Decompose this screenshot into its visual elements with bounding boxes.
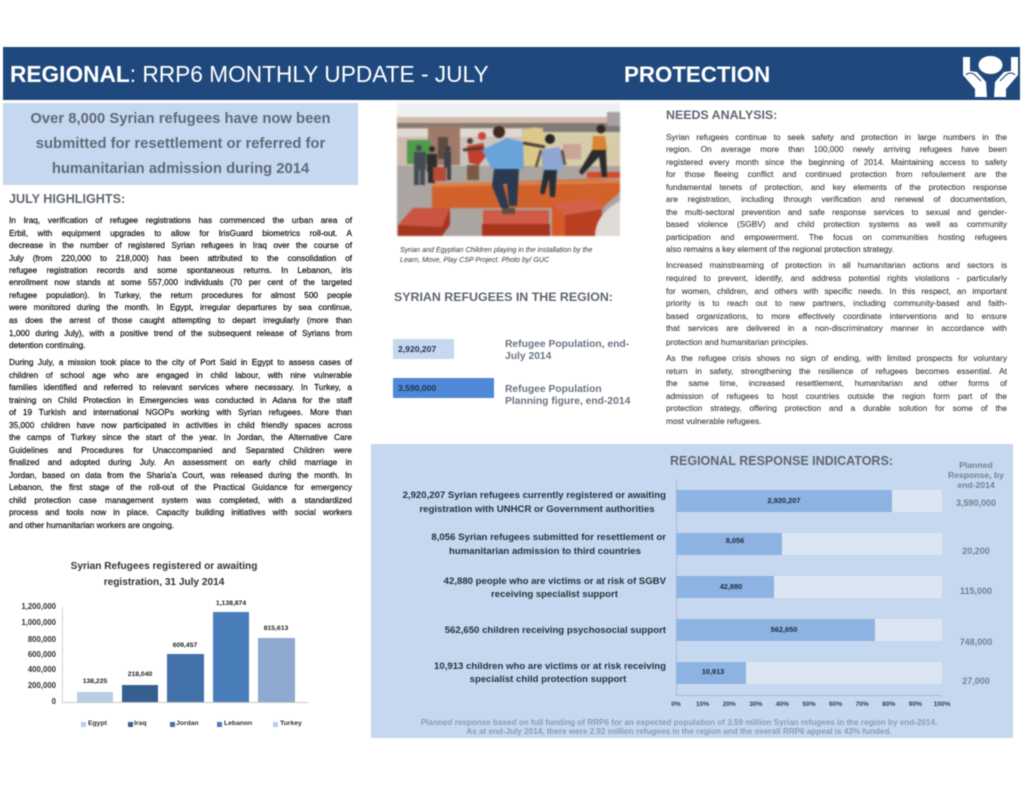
chart title: registration, 31 July 2014 (104, 576, 224, 588)
text block: July highlights: July (from 220,000 to 218,000) has been attributed to the consolidation of (9, 253, 352, 263)
text block: July highlights: 35,000 children have now participated in activities in child friendly spaces across (9, 420, 352, 430)
indicator: resettlement submissions: 8,056 Syrian refugees submitted for resettlement or (431, 532, 666, 543)
text block: needs analysis: the multi-sectoral prevention and safe response services to sexual and gender- (666, 207, 1007, 217)
text block: July highlights: Erbil, with equipment upgrades to allow for IrisGuard biometrics roll-out. A (9, 228, 352, 238)
bar chart: Syrian refugees registered by country (21, 560, 308, 728)
bar chart: Syrian refugees registered by country: 600,000 (28, 650, 56, 659)
stat label: planning figure (505, 384, 631, 407)
text block: July highlights: training on Child Protection in Emergencies was conducted in Adana for the staff (9, 395, 352, 405)
text block: July highlights: 1,000 during July), with a positive trend of the subsequent release of Syrians from (9, 328, 352, 338)
indicator: SGBV support: receiving specialist support (491, 589, 618, 600)
third child in orange (579, 124, 607, 177)
bar chart: Syrian refugees registered by country: 800,000 (28, 635, 56, 644)
indicator: SGBV support (443, 576, 992, 600)
indicator: refugees registered: 3,590,000 (956, 498, 996, 508)
text block: needs analysis: priority is to reach out to new partners, including community-based and faith- (666, 298, 1007, 308)
column heading: planned response: Response, by (948, 470, 1004, 480)
front blocks (398, 208, 450, 227)
stat label: refugee population (504, 338, 630, 362)
indicator: child protection support: 27,000 (962, 676, 990, 686)
central child in blue (463, 126, 545, 214)
text block: July highlights: refugee population). In Turkey, the return procedures for almost 500 people (9, 290, 352, 300)
indicator: child protection support: 10,913 (702, 667, 724, 676)
text block: needs analysis (666, 132, 1008, 426)
text block: July highlights: of 19 Turkish and international NGOPs working with Syrian refugees. More than (9, 407, 352, 417)
footnote: Planned response based on full funding of RRP6 for an expected population of 3.59 million Syrian refugees in the region by end-2014. (421, 718, 937, 727)
text block: needs analysis: for women, children, and others with specific needs. In this respect, an important (666, 286, 1007, 296)
text block: needs analysis: participation and empowerment. The focus on communities hosting refugees (666, 232, 1007, 242)
text block: July highlights: refugee registration records and some spontaneous returns. In Lebanon, iris (9, 265, 352, 275)
indicator: SGBV support: 42,880 (720, 582, 742, 591)
indicator: SGBV support: 115,000 (960, 586, 992, 596)
text block: needs analysis: admission of refugees to host countries outside the region form part of the (666, 391, 1007, 401)
indicator: resettlement submissions (431, 532, 990, 557)
text block: July highlights: finalized and adopted during July. An assessment on early child marriage in (9, 457, 352, 467)
column heading: planned response (948, 460, 1004, 490)
text block: needs analysis: Syrian refugees continue to seek safety and protection in large numbers in the (666, 132, 1007, 142)
bar chart: Syrian refugees registered by country: 815,613 (264, 625, 288, 632)
title: REGIONAL: RRP6 MONTHLY UPDATE - JULY (10, 61, 489, 87)
callout: resettlement headline: submitted for resettlement or referred for (36, 136, 325, 152)
stat bar: refugee population end-July 2014: 2,920,207 (398, 344, 436, 354)
text block: July highlights: Guidelines and Procedures for Unaccompanied and Separated Children were (9, 445, 352, 455)
text block: needs analysis: As the refugee crisis shows no sign of ending, with limited prospects for voluntary (666, 353, 1007, 363)
icon: hands protecting a person (962, 55, 1019, 98)
column heading: planned response: Planned (959, 460, 993, 470)
text block: July highlights: were monitored during the month. In Egypt, irregular departures by sea continue, (9, 302, 352, 312)
text block: needs analysis: based violence (SGBV) and child protection systems as well as community (666, 219, 1007, 229)
text block: needs analysis: protection strategy, offering protection and a durable solution for some of the (666, 403, 1007, 413)
indicator: resettlement submissions: 8,056 (726, 536, 744, 545)
stat label: refugee population: Refugee Population, end- (505, 339, 629, 350)
bar: Jordan (167, 654, 204, 702)
bar: Iraq (122, 685, 158, 702)
stat label: planning figure: Refugee Population (505, 384, 602, 395)
text block: needs analysis: based organizations, to more effectively coordinate interventions and to ensure (666, 311, 1007, 321)
text block: needs analysis: that services are delivered in a non-discriminatory manner in accordance with (666, 323, 1007, 333)
indicator: refugees registered (402, 490, 996, 515)
axis: percent ticks: 10% (696, 701, 709, 708)
text block: July highlights: decrease in the number of registered Syrian refugees in Iraq over the course of (9, 240, 352, 250)
footnote (420, 718, 938, 736)
axis: percent ticks: 40% (776, 701, 789, 708)
chart legend (80, 720, 302, 728)
text block: July highlights (8, 215, 353, 530)
text block: July highlights: child protection case management system was completed, with a standardized (9, 495, 352, 505)
sector heading: protection: PROTECTION (624, 62, 770, 87)
axis: percent ticks: 80% (882, 701, 895, 708)
axis: percent ticks: 60% (829, 701, 842, 708)
text block: needs analysis: also remains a key element of the regional protection strategy. (666, 244, 894, 254)
stat label: refugee population: July 2014 (505, 351, 551, 362)
indicator: refugees registered: 2,920,207 Syrian refugees currently registered or awaiting (403, 490, 666, 501)
text block: needs analysis: registered every month since the beginning of 2014. Maintaining access to safety (666, 157, 1007, 167)
indicator: refugees registered: 2,920,207 (768, 496, 800, 505)
chart title: Syrian Refugees registered or awaiting (71, 561, 257, 572)
photo caption: Syrian and Egyptian Children playing in the installation by the (400, 246, 592, 254)
text block: July highlights: Lebanon, the first stage of the roll-out of the Practical Guidance for emergency (9, 482, 352, 492)
chart legend: Egypt (88, 720, 107, 727)
bar: Lebanon (213, 612, 249, 702)
indicator: psychosocial support (444, 618, 992, 647)
indicator: resettlement submissions: humanitarian admission to third countries (449, 546, 641, 557)
text block: July highlights: During July, a mission took place to the city of Port Said in Egypt to assess cases of (9, 357, 352, 367)
axis: percent ticks: 90% (909, 701, 922, 708)
text block: needs analysis: most vulnerable refugees. (666, 416, 761, 426)
bar chart: Syrian refugees registered by country: 218,040 (128, 671, 152, 678)
chart legend: Turkey (280, 720, 302, 727)
bar chart: Syrian refugees registered by country: 200,000 (28, 681, 56, 690)
stat bar: planning figure end-2014: 3,590,000 (398, 383, 436, 393)
text block: July highlights: process and tools now in place. Capacity building initiatives with social workers (9, 507, 352, 517)
stat bar: refugee population end-July 2014 (393, 339, 454, 359)
text block: July highlights: In Iraq, verification of refugee registrations has commenced the urban area of (9, 215, 352, 225)
axis: percent ticks: 20% (723, 701, 736, 708)
heading: needs analysis: NEEDS ANALYSIS: (666, 108, 777, 122)
bar chart: Syrian refugees registered by country: 138,225 (83, 678, 107, 685)
text block: needs analysis: fundamental tenets of protection, and key elements of the protection response (666, 182, 1007, 192)
heading: July highlights: JULY HIGHLIGHTS: (9, 192, 125, 206)
footnote: As at end-July 2014, there were 2.92 million refugees in the region and the overall RRP6 appeal is 43% funded. (466, 727, 892, 736)
callout: resettlement headline (3, 103, 358, 185)
heading: regional response indicators: REGIONAL RESPONSE INDICATORS: (670, 454, 893, 468)
text block: needs analysis: protection and humanitarian principles. (666, 337, 809, 347)
bar chart: Syrian refugees registered by country: 1,000,000 (21, 618, 56, 627)
bar chart: Syrian refugees registered by country: 609,457 (173, 642, 197, 649)
long orange wall (432, 179, 620, 208)
bar chart: Syrian refugees registered by country: 1,138,874 (216, 600, 246, 607)
axis: percent ticks: 100% (934, 701, 950, 708)
text block: needs analysis: required to prevent, identify, and address potential rights violations - particularly (666, 273, 1007, 283)
text block: July highlights: families identified and referred to relevant services where necessary. In Turkey, a (9, 382, 352, 392)
indicator: psychosocial support: 562,650 (771, 625, 797, 634)
indicator: psychosocial support: 562,650 children receiving psychosocial support (445, 625, 666, 636)
stat label: planning figure: Planning figure, end-2014 (505, 396, 630, 406)
bar chart: Syrian refugees registered by country: 1,200,000 (21, 602, 56, 611)
text block: needs analysis: Increased mainstreaming of protection in all humanitarian actions and sectors is (666, 260, 1007, 270)
bar chart: Syrian refugees registered by country: 0 (52, 697, 56, 706)
callout: resettlement headline: humanitarian admission during 2014 (52, 161, 309, 177)
people (414, 145, 426, 185)
chart legend: Lebanon (224, 720, 252, 727)
heading: Syrian refugees in the region: SYRIAN REFUGEES IN THE REGION: (394, 290, 613, 304)
indicator: child protection support: 10,913 children who are victims or at risk receiving (434, 661, 666, 672)
photo caption: Learn, Move, Play CSP Project. Photo by/ GUC (400, 256, 549, 264)
axis: percent ticks (670, 700, 951, 708)
text block: July highlights: enrollment now stands at some 557,000 individuals (70 per cent of the targeted (9, 277, 352, 287)
text block: July highlights: and other humanitarian workers are ongoing. (9, 520, 174, 530)
text block: July highlights: as does the arrest of those caught attempting to depart irregularly (more than (9, 315, 352, 325)
photo: children playing on orange blocks (396, 103, 622, 238)
bar: Turkey (258, 638, 295, 702)
indicator: refugees registered: registration with UNHCR or Government authorities (419, 504, 655, 515)
axis: percent ticks: 0% (671, 701, 681, 708)
text block: needs analysis: for those fleeing conflict and continued protection from refoulement are the (666, 169, 1007, 179)
chart legend: Iraq (134, 720, 146, 727)
indicator: SGBV support: 42,880 people who are victims or at risk of SGBV (444, 576, 666, 587)
indicator: psychosocial support: 748,000 (960, 637, 992, 647)
axis: percent ticks: 70% (856, 701, 869, 708)
chart legend: Jordan (176, 720, 199, 727)
text block: July highlights: the camps of Turkey since the start of the year. In Jordan, the Alternative Care (9, 432, 352, 442)
text block: needs analysis: are registration, including through verification and renewal of documentation, (666, 194, 1007, 204)
indicator: child protection support: specialist child protection support (470, 674, 626, 685)
stat bar: planning figure end-2014 (393, 378, 494, 398)
header banner (3, 47, 1020, 100)
panel: regional response indicators (371, 444, 1013, 738)
text block: July highlights: detention continuing. (9, 340, 86, 350)
text block: July highlights: Jordan, based on data from the Sharia'a Court, was released during the month. In (9, 470, 352, 480)
bar chart: Syrian refugees registered by country: 400,000 (28, 665, 56, 674)
second child (536, 134, 565, 197)
bar: Egypt (77, 692, 113, 702)
indicator: resettlement submissions: 20,200 (962, 546, 990, 556)
column heading: planned response: end-2014 (957, 480, 995, 490)
callout: resettlement headline: Over 8,000 Syrian refugees have now been (30, 111, 331, 127)
text block: needs analysis: region. On average more than 100,000 newly arriving refugees have been (666, 144, 1007, 154)
axis: percent ticks: 30% (749, 701, 762, 708)
indicator: child protection support (434, 661, 990, 686)
child in red behind (467, 132, 487, 180)
text block: needs analysis: return in safety, strengthening the resilience of refugees becomes essential. At (666, 366, 1007, 376)
chart title (70, 560, 258, 588)
text block: needs analysis: the same time, increased resettlement, humanitarian and other forms of (666, 378, 1007, 388)
photo caption (400, 246, 593, 264)
axis: percent ticks: 50% (802, 701, 816, 708)
text block: July highlights: children of school age who are engaged in child labour, with nine vulnerable (9, 370, 352, 380)
